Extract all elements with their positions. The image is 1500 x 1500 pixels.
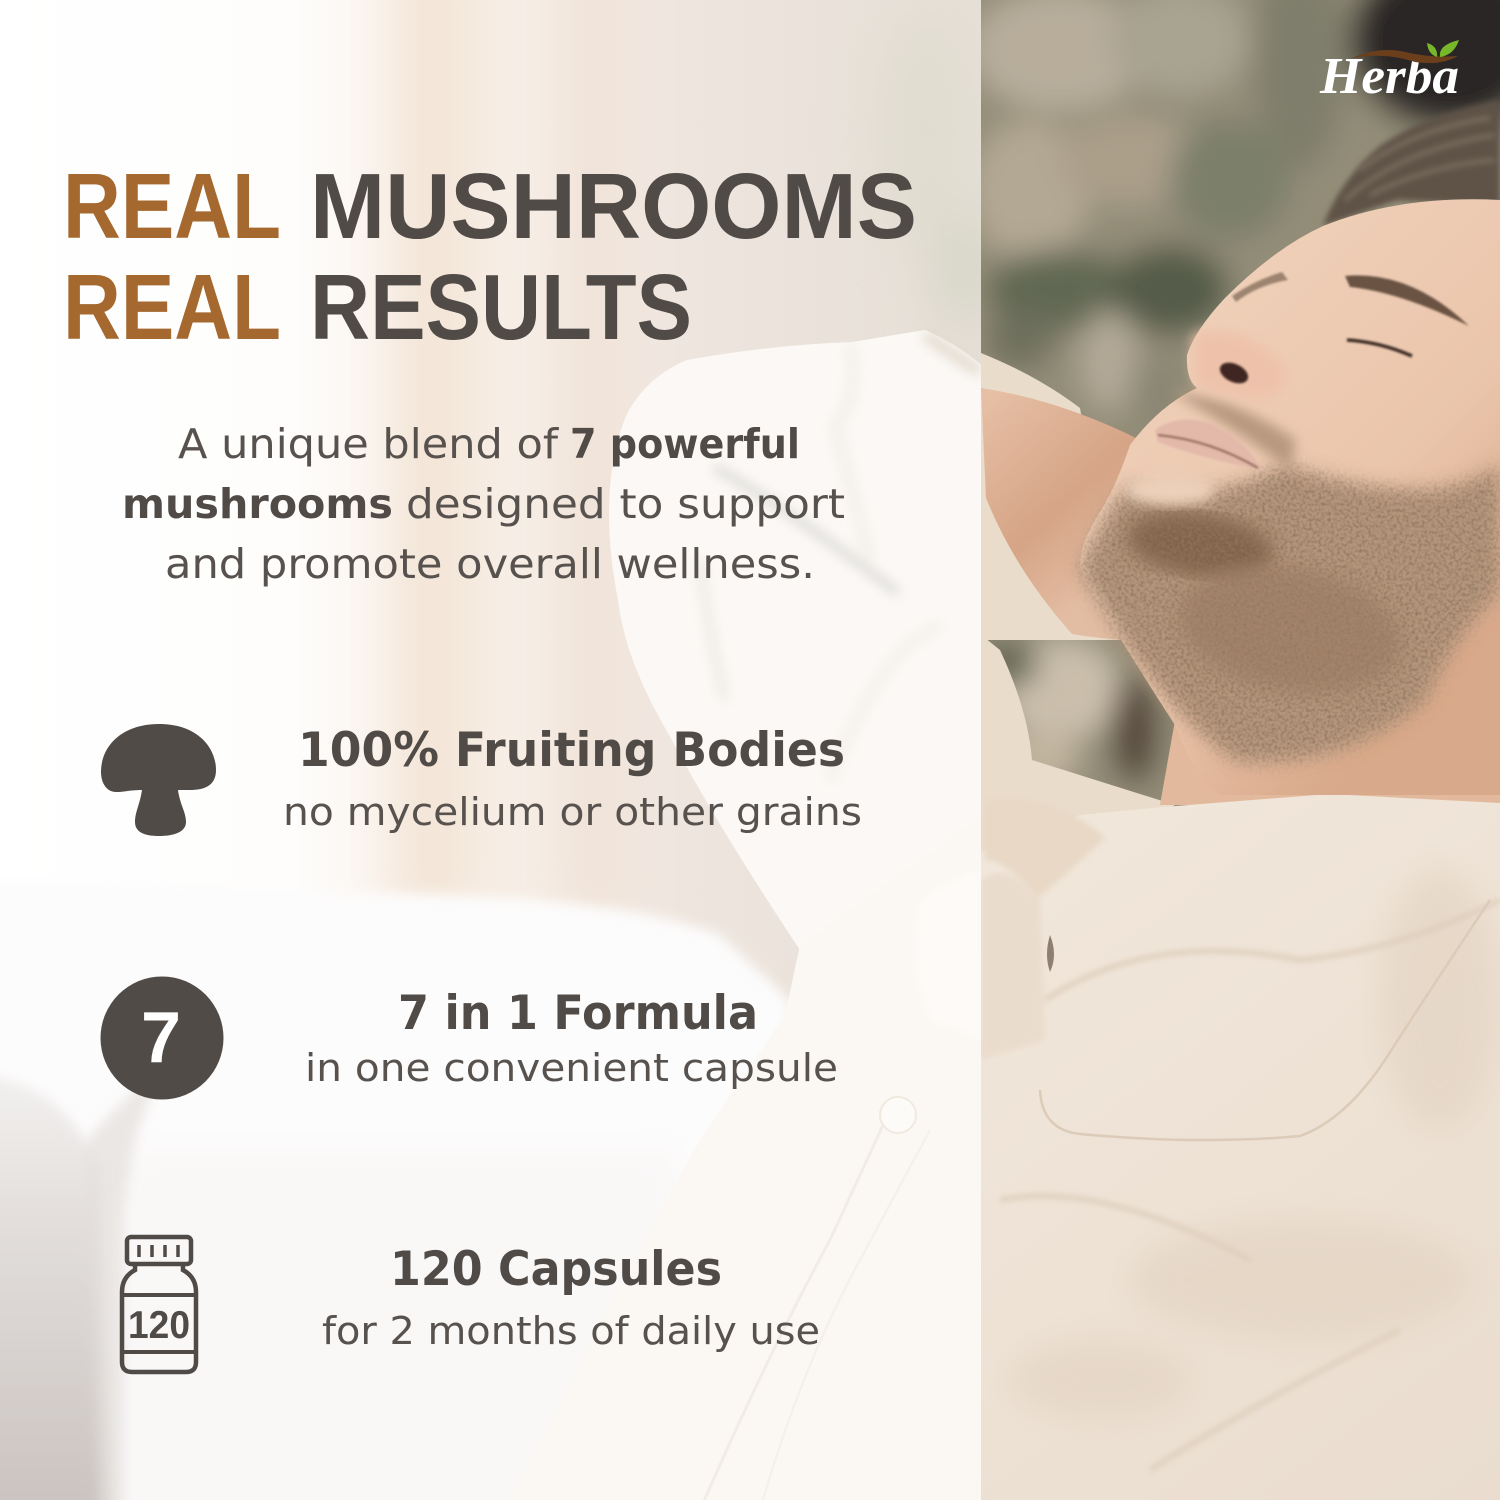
couch shading (120, 1150, 680, 1500)
shirt fold lines (1000, 900, 1500, 1470)
translucent left panel with washed photo (0, 0, 1032, 1500)
title (63, 154, 917, 359)
feature: seven in one (305, 986, 838, 1090)
inner sleeve fold (984, 816, 1104, 896)
neck (1160, 724, 1500, 805)
nose (1192, 331, 1286, 400)
intro paragraph: and promote overall wellness. (165, 540, 815, 588)
icon: number seven badge: 7 (141, 998, 181, 1078)
logo swoosh (1352, 50, 1458, 63)
hair (1323, 100, 1500, 226)
logo: Herba (1319, 40, 1459, 105)
feature: seven in one: in one convenient capsule (305, 1046, 838, 1090)
icon: mushroom (101, 724, 216, 836)
buttonhole (1047, 935, 1054, 972)
closed eye (1347, 340, 1412, 356)
feature: fruiting bodies: no mycelium or other grains (283, 790, 862, 834)
title: REAL (63, 255, 281, 359)
intro paragraph: mushrooms (122, 480, 393, 528)
icon: capsule bottle (122, 1237, 196, 1372)
lower sleeve edge (981, 640, 1175, 852)
feature: fruiting bodies: 100% Fruiting Bodies (298, 723, 845, 778)
feature: fruiting bodies (283, 723, 862, 834)
pocket outline (1040, 900, 1490, 1140)
icon: capsule bottle: 120 (128, 1304, 190, 1347)
sleeve creases (698, 330, 981, 694)
sleeve cuff fold (914, 870, 981, 1040)
face (1080, 199, 1500, 795)
title: REAL (63, 154, 281, 258)
white couch (338, 890, 789, 1190)
beard (1080, 392, 1500, 761)
shirt placket and button (700, 1097, 930, 1500)
intro paragraph: designed to support (406, 480, 845, 528)
sleeve behind forearm (981, 353, 1120, 640)
forearm (981, 388, 1140, 640)
title: RESULTS (310, 255, 692, 359)
shirt torso right (960, 794, 1500, 1500)
blurred foliage bokeh (981, 0, 1500, 806)
shirt shading (1010, 870, 1500, 1420)
title: MUSHROOMS (310, 154, 917, 258)
eyebrow (1345, 275, 1469, 326)
logo wordmark: Herba (1319, 48, 1459, 105)
shirt flap shadow (981, 873, 1045, 1060)
feature: seven in one: 7 in 1 Formula (398, 986, 758, 1041)
feature: capsules: for 2 months of daily use (322, 1309, 820, 1353)
room and curtains (326, 0, 981, 1010)
nostril (1218, 361, 1250, 385)
curtain folds (400, 0, 995, 920)
couch armrest (0, 1080, 152, 1500)
intro paragraph: 7 powerful (570, 420, 800, 468)
lips (1155, 420, 1262, 470)
background photo: right side, man resting (940, 0, 1500, 1500)
icon: number seven badge (100, 976, 224, 1100)
feature: capsules: 120 Capsules (390, 1242, 722, 1297)
shirt torso left (788, 868, 981, 1500)
logo leaves (1427, 40, 1459, 57)
intro paragraph: A unique blend of (178, 420, 560, 468)
sleeve (609, 330, 981, 948)
intro paragraph (122, 420, 845, 588)
feature: capsules (322, 1242, 820, 1353)
